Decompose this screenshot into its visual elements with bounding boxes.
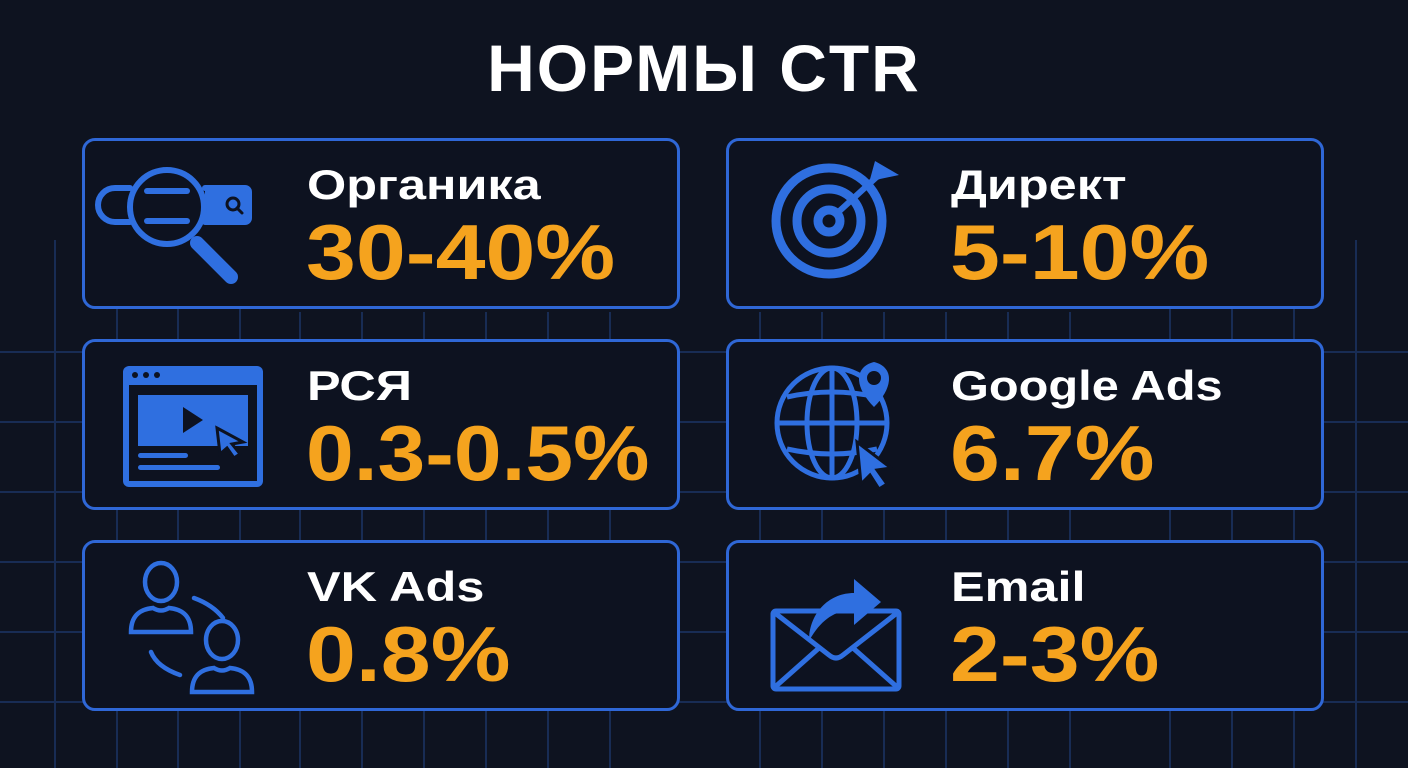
panel: google ads	[726, 339, 1324, 510]
label: Директ	[951, 161, 1127, 208]
label: Google Ads	[951, 362, 1223, 409]
panel: organika	[82, 138, 680, 309]
value: 0.8%	[306, 610, 510, 698]
value: 0.3-0.5%	[306, 409, 649, 497]
icon: search	[95, 167, 252, 284]
panel: rsya	[82, 339, 680, 510]
icon: globe	[774, 362, 890, 487]
panel: direkt	[726, 138, 1324, 309]
panel: email	[726, 540, 1324, 711]
icon: people	[128, 560, 254, 694]
icon: browser video	[123, 366, 263, 487]
value: 2-3%	[950, 610, 1159, 698]
icon: envelope	[770, 579, 902, 692]
value: 30-40%	[306, 208, 615, 296]
icon: target	[772, 161, 899, 278]
value: 6.7%	[950, 409, 1154, 497]
panel: vk ads	[82, 540, 680, 711]
label: Email	[951, 563, 1085, 610]
label: РСЯ	[307, 362, 412, 409]
label: Органика	[307, 161, 541, 208]
title: НОРМЫ CTR	[487, 31, 921, 105]
label: VK Ads	[307, 563, 484, 610]
value: 5-10%	[950, 208, 1209, 296]
